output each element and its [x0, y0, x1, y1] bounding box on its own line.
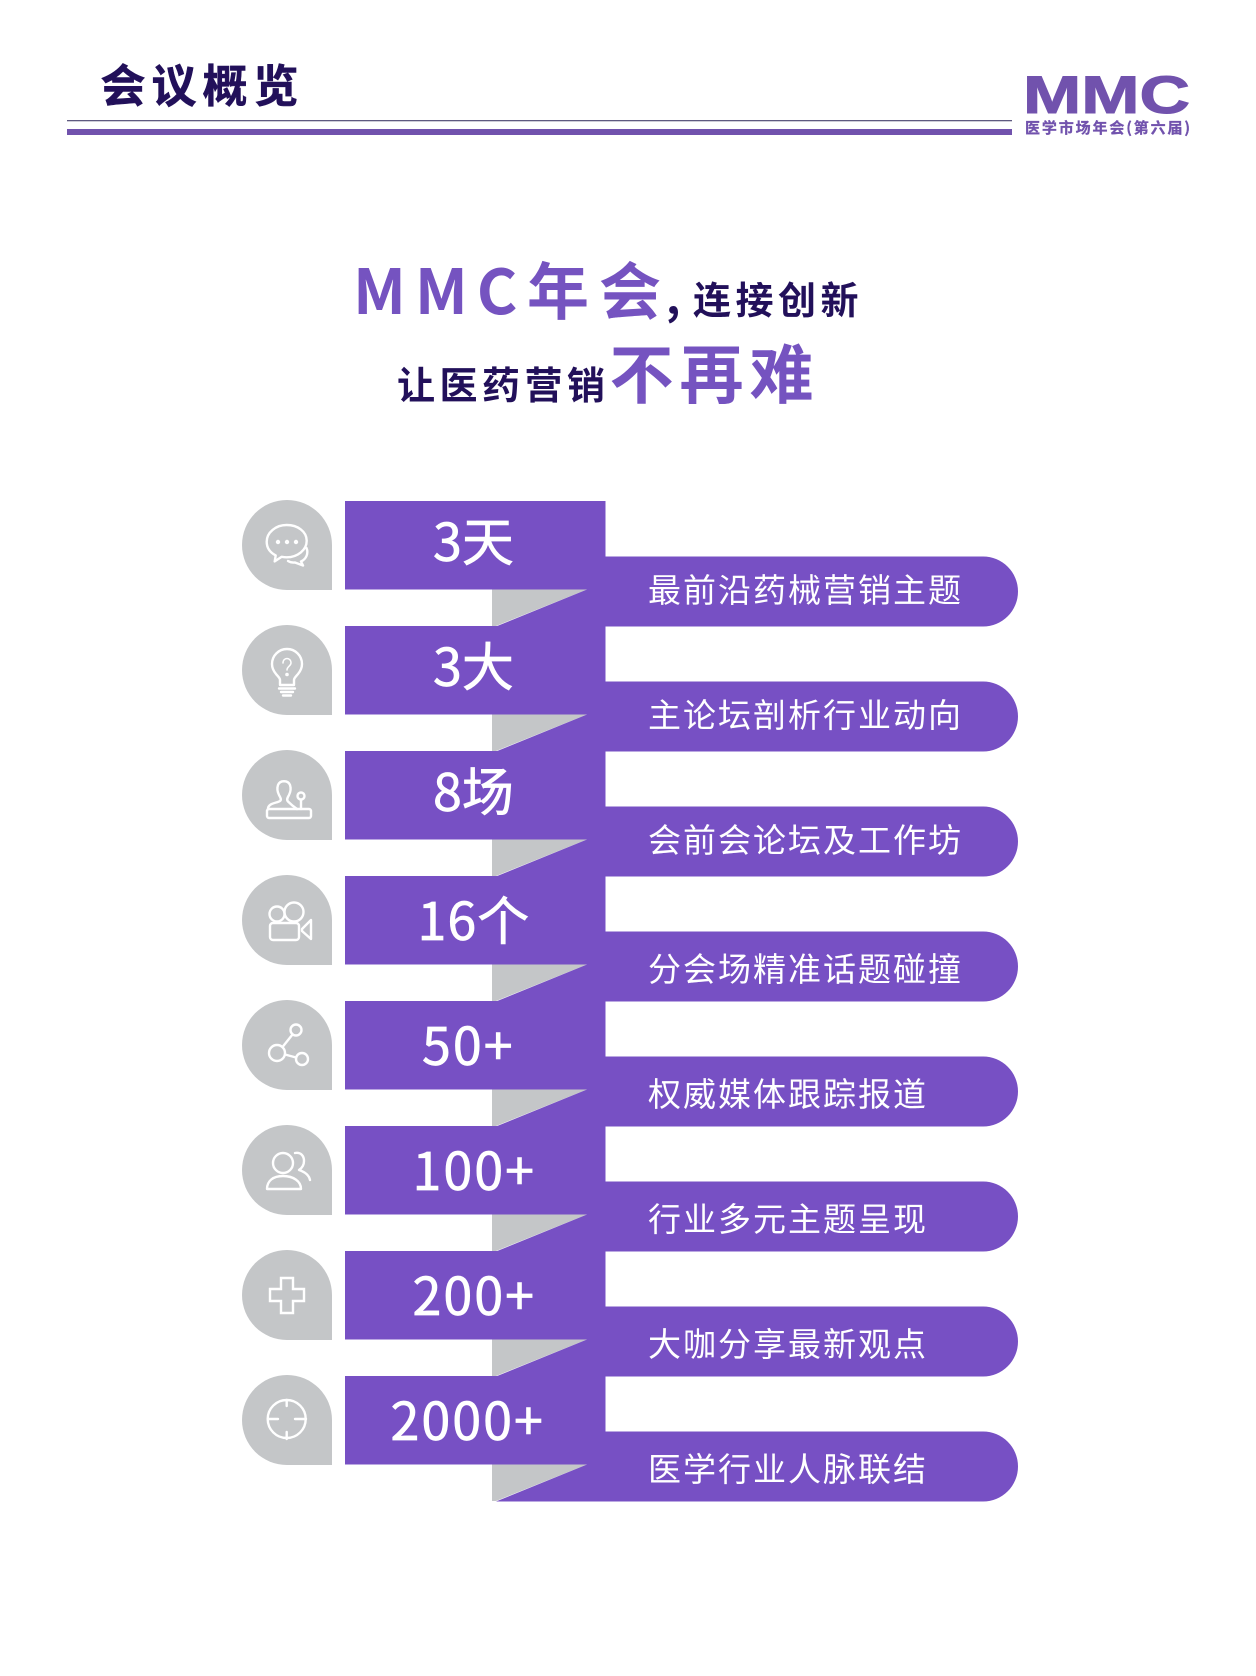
banner: [345, 1126, 1018, 1252]
description: 权威媒体跟踪报道: [648, 1068, 928, 1116]
description: 主论坛剖析行业动向: [648, 689, 963, 737]
row 6: 100+: [242, 1125, 1018, 1252]
description: 分会场精准话题碰撞: [648, 943, 963, 991]
stat: 50+: [422, 1005, 515, 1080]
row 7: 200+: [242, 1250, 1018, 1376]
banner: [345, 1251, 1018, 1376]
logo: [1023, 66, 1190, 138]
stat: 8场: [433, 751, 514, 826]
icon: film camera: [242, 875, 332, 965]
headline: [353, 242, 863, 417]
row 5: 50+: [242, 1000, 1018, 1126]
row 2: 3大: [242, 625, 1018, 752]
header rule: [67, 120, 1012, 135]
row 4: 16个: [242, 875, 1018, 1002]
icon: target crosshair: [242, 1375, 332, 1465]
banner: [345, 1376, 1018, 1502]
description: 大咖分享最新观点: [648, 1318, 928, 1366]
description: 会前会论坛及工作坊: [648, 814, 963, 862]
headline line 1: MMC: [353, 242, 526, 332]
stat: 16个: [418, 880, 530, 955]
icon: people: [242, 1125, 332, 1215]
section title: 会议概览: [100, 50, 305, 115]
banner: [345, 626, 1018, 752]
icon: speech bubbles: [242, 500, 332, 590]
description: 医学行业人脉联结: [648, 1443, 928, 1491]
stat: 3天: [433, 501, 514, 576]
logo: 医学市场年会(第六届): [1025, 117, 1190, 138]
icon: plus cross: [242, 1250, 332, 1340]
stat: 200+: [412, 1255, 536, 1330]
banner: [345, 876, 1018, 1002]
header: [67, 50, 1190, 138]
logo: MMC: [1023, 66, 1190, 125]
row 1: 3天: [242, 500, 1018, 626]
banner: [345, 751, 1018, 876]
icon: share nodes: [242, 1000, 332, 1090]
banner: [345, 1001, 1018, 1126]
description: 最前沿药械营销主题: [648, 564, 963, 612]
banner: [345, 501, 1018, 626]
headline line 1: 连接创新: [693, 270, 863, 325]
row 3: 8场: [242, 750, 1018, 876]
stat: 2000+: [390, 1380, 545, 1455]
headline line 1: ,: [666, 263, 680, 327]
stat: 3大: [433, 626, 514, 701]
stat: 100+: [412, 1130, 536, 1205]
description: 行业多元主题呈现: [648, 1193, 928, 1241]
icon: speaker at podium: [242, 750, 332, 840]
headline line 2: 让医药营销: [397, 355, 610, 410]
headline line 1: 年会: [527, 242, 671, 332]
row 8: 2000+: [242, 1375, 1018, 1502]
icon: light bulb: [242, 625, 332, 715]
headline line 2: 不再难: [610, 325, 820, 417]
